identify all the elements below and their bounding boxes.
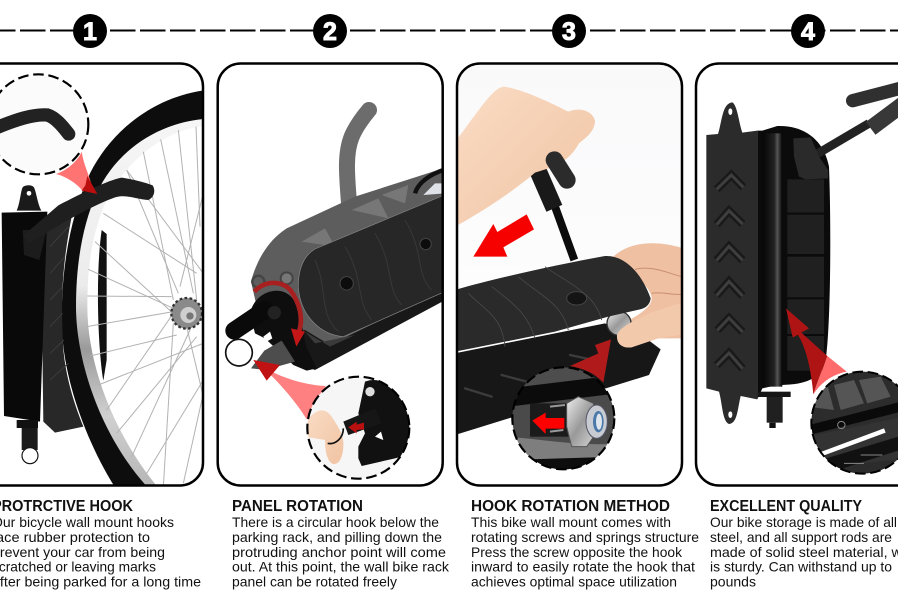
caption: protective hook xyxy=(0,498,201,590)
red pointer arrow xyxy=(570,339,611,383)
carry handle xyxy=(413,168,442,194)
panel: excellent quality xyxy=(696,63,898,486)
heading: PANEL ROTATION xyxy=(232,498,363,515)
grey hook ghost xyxy=(347,110,369,203)
callout circle: rib close-up xyxy=(807,372,898,474)
panel: hook rotation method xyxy=(455,63,688,486)
body text: parking rack, and pilling down the xyxy=(232,529,442,545)
step number 2 xyxy=(313,14,347,48)
upper hand xyxy=(455,87,595,227)
step number 1: 1 xyxy=(83,18,97,46)
back plate with chevrons xyxy=(706,102,757,424)
body text: steel, and all support rods are xyxy=(710,529,892,545)
lower hand xyxy=(614,243,681,338)
step number 3 xyxy=(552,14,586,48)
red rotation arrow xyxy=(254,283,305,347)
body text xyxy=(471,514,699,590)
heading: EXCELLENT QUALITY xyxy=(710,498,863,515)
step number 4 xyxy=(791,14,825,48)
body text: out. At this point, the wall bike rack xyxy=(232,558,450,574)
caption: hook rotation method xyxy=(471,498,699,590)
body text xyxy=(232,514,450,590)
step number 1 xyxy=(73,14,107,48)
base frame xyxy=(303,294,442,370)
body text: rotating screws and springs structure xyxy=(471,529,699,545)
heading: HOOK ROTATION METHOD xyxy=(471,498,670,515)
handle rod xyxy=(538,170,574,260)
folded hook xyxy=(793,87,898,179)
body text: panel can be rotated freely xyxy=(232,574,397,590)
body text: achieves optimal space utilization xyxy=(471,574,677,590)
red pointer arrow xyxy=(253,360,326,419)
caption: panel rotation xyxy=(232,498,450,590)
side profile xyxy=(757,126,830,428)
callout circle: spring close-up xyxy=(511,366,616,470)
black pedal plate xyxy=(455,256,651,352)
wall mount body xyxy=(2,185,83,464)
caption: excellent quality xyxy=(710,498,898,590)
callout circle: pulling pin xyxy=(305,377,412,479)
step number 3: 3 xyxy=(562,18,576,46)
red pointer arrow xyxy=(786,308,847,394)
step number 4: 4 xyxy=(801,18,815,46)
panel: protective hook with bicycle wheel xyxy=(0,64,213,490)
bracket and pin xyxy=(226,272,317,371)
callout circle: hook close-up xyxy=(0,74,88,174)
red pointer arrow xyxy=(56,152,97,194)
body text: This bike wall mount comes with xyxy=(471,514,671,530)
body text: There is a circular hook below the xyxy=(232,514,439,530)
step timeline xyxy=(0,14,898,48)
body text: pounds xyxy=(710,574,756,590)
panel: panel rotation xyxy=(217,63,448,486)
body text xyxy=(0,514,201,590)
hook arm xyxy=(30,178,154,233)
body text: is sturdy. Can withstand up to xyxy=(710,558,892,574)
body text xyxy=(710,514,898,590)
handle rubber end xyxy=(554,160,567,180)
lower body xyxy=(455,323,661,435)
body text: Press the screw opposite the hook xyxy=(471,544,683,560)
body text: Our bike storage is made of all xyxy=(710,514,897,530)
big red arrow xyxy=(473,214,534,257)
silver nut xyxy=(607,311,631,335)
black panel xyxy=(298,193,448,337)
body text: inward to easily rotate the hook that xyxy=(471,558,695,574)
rack body ghost xyxy=(250,170,442,342)
step number 2: 2 xyxy=(323,18,337,46)
body text: protruding anchor point will come xyxy=(232,544,446,560)
bicycle wheel xyxy=(62,89,213,490)
